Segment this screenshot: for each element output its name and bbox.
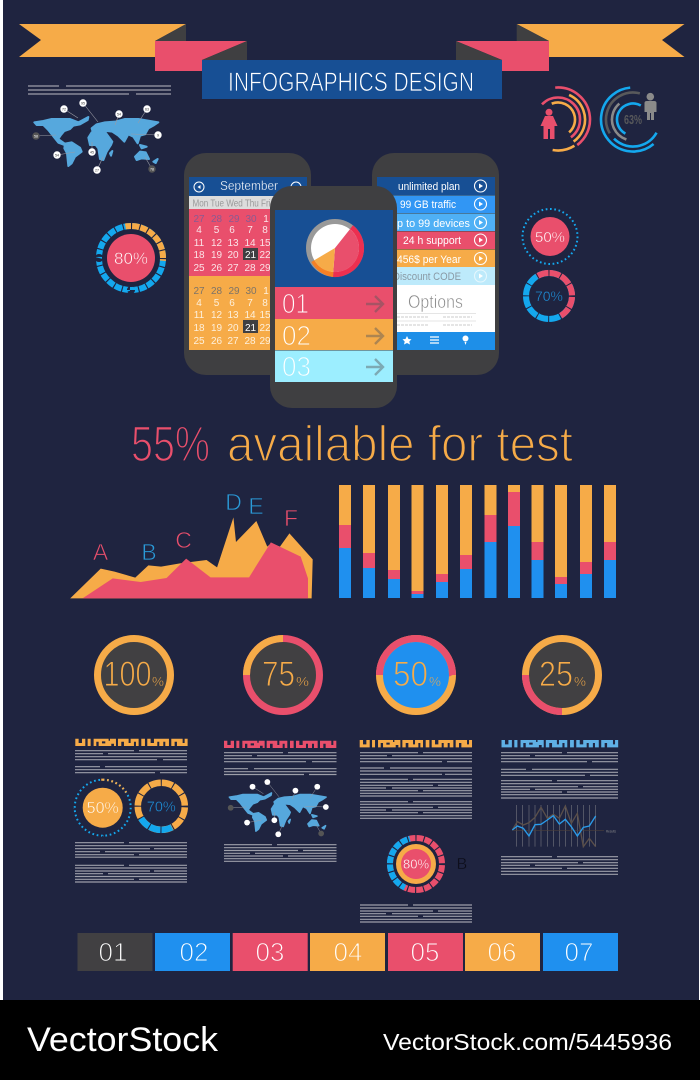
phone: calendar: September: [220, 178, 279, 193]
phone: calendar: 15: [259, 310, 271, 321]
donut: 50%: [522, 209, 578, 264]
column 1 text: [75, 751, 187, 773]
phone: calendar: 18: [193, 323, 205, 334]
phone: calendar: 4: [196, 225, 202, 236]
column 3 text: [360, 753, 472, 818]
phone: pricing plan: 24 h support: [403, 235, 461, 247]
gauge: 75%: %: [296, 674, 309, 689]
area chart: B: [141, 539, 157, 565]
phone: calendar: 20: [227, 250, 239, 261]
donut: 80%: [94, 221, 168, 295]
phone: pricing plan: Options: [408, 292, 463, 312]
phone: calendar: 28: [244, 336, 256, 347]
world map with markers: [32, 99, 162, 174]
donut: 70%: 70%: [535, 288, 563, 304]
phone: calendar: 14: [244, 310, 256, 321]
text block: map caption: [28, 86, 171, 94]
banner ribbons: [19, 24, 684, 71]
line chart: Results: [606, 828, 616, 834]
rings: male: 63%: [624, 112, 642, 127]
phone: calendar: 29: [259, 336, 271, 347]
column 3 lower text: [360, 905, 472, 922]
phone: calendar: 20: [227, 323, 239, 334]
gauge: 100%: %: [152, 674, 164, 689]
area chart: [70, 489, 313, 598]
area chart: C: [175, 527, 192, 553]
area chart: D: [225, 489, 242, 515]
label B: B: [457, 856, 467, 873]
phone: pricing plan: unlimited plan: [398, 181, 460, 193]
donut: 70%: [518, 265, 580, 327]
column 3 heading: [360, 740, 472, 747]
headline: 55%: [131, 416, 210, 472]
world map with markers: 95: [81, 101, 85, 105]
phone: calendar: 8: [262, 298, 268, 309]
phone: calendar: 29: [228, 286, 240, 297]
donut: 80%: 80%: [114, 249, 148, 268]
phone: calendar: 6: [229, 298, 235, 309]
donut: 70% orange: 70%: [147, 800, 176, 816]
phone: calendar: 22: [259, 250, 271, 261]
column 4 text: [501, 753, 618, 798]
phone: calendar: 7: [247, 298, 253, 309]
donut: 80% with orange core: [381, 829, 451, 899]
step 03: [233, 933, 308, 971]
gauge: 75%: [246, 638, 320, 712]
phone: calendar: 15: [259, 238, 271, 249]
column 1: [75, 739, 193, 882]
gauge: 50%: %: [429, 674, 441, 689]
phone: calendar: 1: [263, 214, 269, 225]
phone: calendar: 27: [193, 214, 205, 225]
pie chart: [306, 219, 364, 277]
phone: calendar: 21: [245, 323, 256, 334]
column 2 lower text: [224, 845, 336, 861]
step 03: 03: [256, 937, 284, 967]
phone: calendar: 7: [247, 225, 253, 236]
phone: menu with pie chart: 02: [282, 320, 311, 351]
phone: calendar: 18: [193, 250, 205, 261]
donut: 50% orange: [75, 780, 131, 836]
phone: calendar: 22: [259, 323, 271, 334]
gauge: 25%: [526, 638, 598, 712]
phone: calendar: 30: [245, 214, 257, 225]
column 4 lower text: [501, 857, 618, 874]
phone: calendar: 27: [227, 336, 239, 347]
phone: calendar: [184, 153, 311, 375]
step 02: 02: [180, 937, 208, 967]
phone: calendar: 26: [211, 263, 222, 274]
gauge: 75%: 75: [262, 655, 295, 694]
phone: calendar: 28: [211, 214, 222, 225]
phone: calendar: 11: [194, 310, 205, 321]
step 06: 06: [488, 937, 516, 967]
step 04: 04: [334, 937, 362, 967]
world map with markers: 78: [150, 167, 154, 171]
phone: calendar: 26: [211, 336, 222, 347]
footer watermark bar: [0, 1000, 700, 1080]
world map with markers: 45: [90, 150, 94, 154]
area chart: F: [284, 505, 298, 531]
column 4: [501, 740, 618, 874]
step 05: 05: [411, 937, 439, 967]
phone: calendar: 6: [229, 225, 235, 236]
phone: calendar: 28: [211, 286, 222, 297]
phone: calendar: 5: [214, 298, 220, 309]
phone: calendar: 25: [193, 336, 205, 347]
phone: calendar: 13: [227, 310, 239, 321]
area chart: A: [93, 539, 109, 565]
headline: available for test: [227, 416, 573, 472]
step 01: [78, 933, 152, 971]
footer watermark bar: VectorStock.com/5445936: [383, 1029, 672, 1055]
world map with markers: 54: [55, 153, 59, 157]
phone: calendar: 12: [211, 238, 222, 249]
phone: calendar: Mon Tue Wed Thu Fri: [192, 198, 270, 210]
phone: calendar: 12: [211, 310, 222, 321]
gauge: 100%: 100: [104, 655, 152, 694]
column 1 heading: [75, 739, 188, 746]
step 05: [388, 933, 463, 971]
step 06: [465, 933, 540, 971]
phone: calendar: 19: [211, 323, 222, 334]
step 02: [155, 933, 230, 971]
phone: calendar: 27: [227, 263, 239, 274]
world map small: [228, 779, 329, 837]
column 3: [360, 740, 472, 922]
gauge: 25%: %: [574, 674, 586, 689]
donut: 50%: 50%: [535, 229, 565, 246]
phone: calendar: 13: [227, 238, 239, 249]
arrows: [366, 296, 383, 375]
phone: calendar: 29: [228, 214, 240, 225]
phone: calendar: 27: [193, 286, 205, 297]
rings: male: [588, 74, 678, 165]
world map with markers: 54: [117, 112, 121, 116]
gauge: 50%: [380, 638, 452, 712]
column 1 lower text: [75, 843, 187, 882]
phone: calendar: 8: [262, 225, 268, 236]
phone: calendar: 29: [259, 263, 271, 274]
phone: calendar: 14: [244, 238, 256, 249]
gauge: 50%: 50: [393, 655, 428, 694]
column 2: [224, 741, 336, 861]
phone: calendar: 19: [211, 250, 222, 261]
gauge: 25%: 25: [539, 655, 573, 694]
phone: menu with pie chart: 03: [282, 351, 311, 382]
title: [202, 60, 502, 99]
title: INFOGRAPHICS DESIGN: [228, 67, 474, 97]
numbered steps: [78, 933, 618, 971]
phone: calendar: 4: [196, 298, 202, 309]
phone: calendar: 1: [263, 286, 269, 297]
step 07: [543, 933, 618, 971]
stacked bar chart: [339, 485, 616, 598]
donut: 50% orange: 50%: [87, 800, 119, 817]
world map with markers: 63: [145, 107, 149, 111]
world map with markers: 9: [157, 133, 159, 137]
phone: calendar: 25: [193, 263, 205, 274]
phone: calendar: 5: [214, 225, 220, 236]
step 01: 01: [99, 937, 127, 967]
phone: menu with pie chart: 01: [282, 288, 309, 319]
gauge: 100%: [98, 638, 170, 712]
step 04: [310, 933, 385, 971]
phone: pricing plan: Discount CODE: [393, 271, 461, 283]
phone: calendar: 11: [194, 238, 205, 249]
step 07: 07: [565, 937, 593, 967]
world map with markers: 27: [95, 168, 99, 172]
column 2 heading: [224, 741, 336, 748]
footer watermark bar: VectorStock: [27, 1021, 219, 1059]
phone: pricing plan: 99 GB traffic: [400, 199, 456, 211]
phone: pricing plan: 456$ per Year: [397, 254, 461, 266]
phone: calendar: 30: [245, 286, 257, 297]
donut: 80% with orange core: 80%: [403, 856, 429, 872]
phone: calendar: 21: [245, 250, 256, 261]
phone: calendar: 28: [244, 263, 256, 274]
column 2 text: [224, 753, 336, 774]
phone: pricing plan: up to 99 devices: [391, 218, 470, 230]
phone: pricing plan: [372, 153, 499, 375]
world map with markers: 58: [34, 134, 38, 138]
phone: menu with pie chart: [270, 186, 397, 408]
rings: female: [515, 77, 601, 162]
world map with markers: 72: [62, 107, 66, 111]
column 4 heading: [502, 740, 618, 747]
area chart: E: [248, 493, 264, 519]
donut: 70% orange: [130, 775, 193, 838]
